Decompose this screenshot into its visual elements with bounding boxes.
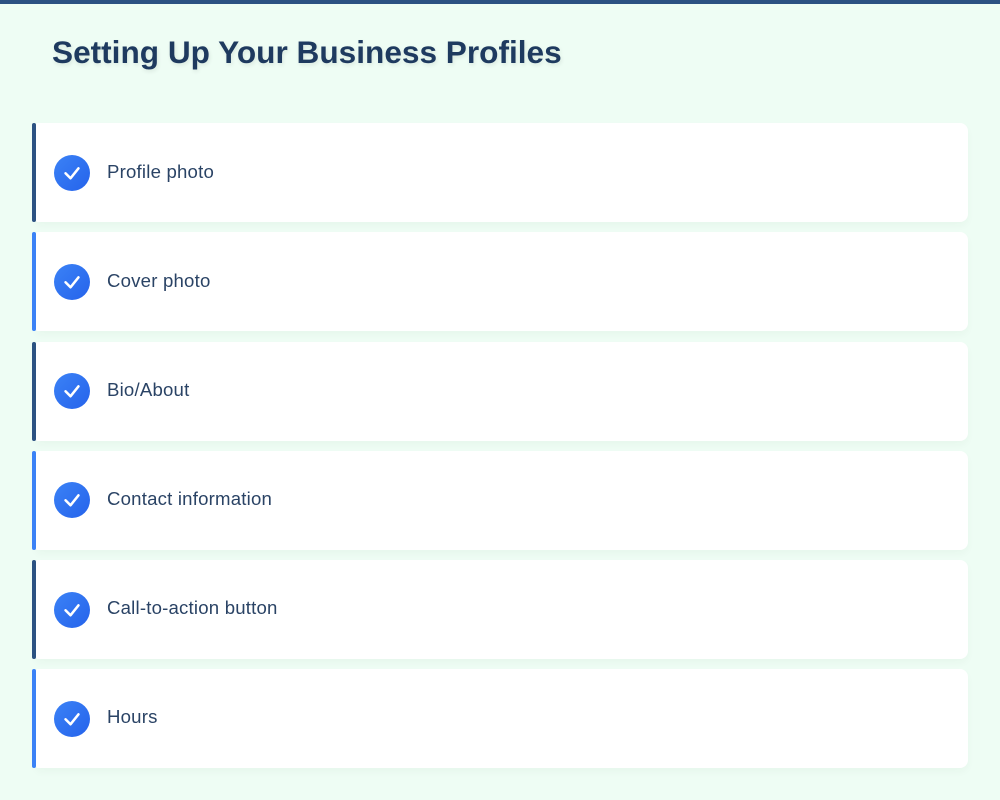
accent bar — [32, 342, 36, 440]
accent bar — [32, 669, 36, 768]
icon: check circle — [54, 373, 90, 409]
text: contact information: Contact information — [107, 488, 272, 508]
accent bar — [32, 450, 36, 550]
accent bar — [32, 123, 36, 222]
text: profile photo: Profile photo — [107, 161, 214, 182]
icon: check circle — [54, 592, 90, 628]
text: cover photo: Cover photo — [107, 270, 210, 291]
icon: check circle — [54, 264, 90, 300]
accent bar — [32, 560, 36, 659]
panel: contact information item — [36, 450, 968, 550]
panel: bio/about item — [36, 342, 968, 440]
text: bio/about: Bio/About — [107, 378, 189, 400]
panel: profile photo item — [36, 123, 968, 222]
title: Setting Up Your Business Profiles — [52, 34, 562, 70]
panel: hours item — [36, 669, 968, 768]
icon: check circle — [54, 482, 90, 518]
text: hours: Hours — [107, 706, 158, 727]
panel: cover photo item — [36, 232, 968, 331]
accent bar — [32, 232, 36, 331]
top accent bar — [0, 0, 1000, 4]
icon: check circle — [54, 154, 90, 190]
panel: call-to-action button item — [36, 560, 968, 659]
text: call-to-action button: Call-to-action button — [107, 597, 278, 618]
icon: check circle — [54, 700, 90, 736]
